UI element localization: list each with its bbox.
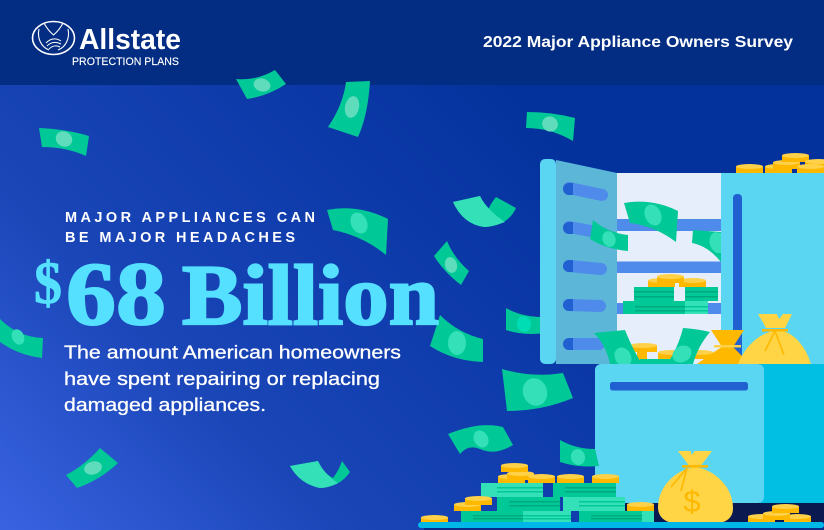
icon: hands in oval	[32, 22, 74, 54]
bill	[0, 319, 43, 358]
coin piles	[421, 463, 811, 524]
description: damaged appliances.	[64, 395, 266, 415]
yellow money bag	[738, 314, 811, 364]
dark shadow band	[625, 503, 824, 522]
interior	[617, 173, 721, 364]
big number: Billion	[182, 247, 439, 343]
money bag with dollar sign	[658, 451, 733, 523]
cash stacks	[461, 483, 654, 522]
description: The amount American homeowners	[64, 342, 401, 362]
open door	[540, 159, 617, 364]
bills at fridge bottom	[594, 328, 710, 370]
description: have spent repairing or replacing	[64, 369, 380, 389]
freezer side	[760, 364, 824, 503]
coins and cash on shelf	[623, 274, 718, 314]
panel: falling money	[0, 70, 575, 488]
floor	[418, 522, 824, 530]
big number: $	[34, 250, 62, 316]
bill	[328, 81, 370, 137]
right fridge wall	[721, 173, 824, 364]
bill	[236, 70, 286, 99]
fridge handle	[733, 194, 742, 364]
coins on top of fridge	[736, 153, 824, 173]
big number	[34, 245, 439, 344]
door racks	[569, 188, 602, 344]
headline: BE MAJOR HEADACHES	[65, 230, 295, 246]
survey title: 2022 Major Appliance Owners Survey	[483, 34, 793, 51]
freezer front	[595, 364, 764, 503]
bill	[506, 308, 545, 334]
fridge: upper compartment	[540, 153, 824, 370]
headline	[65, 210, 315, 246]
wordmark: Allstate	[79, 24, 181, 56]
headline: MAJOR APPLIANCES CAN	[65, 210, 315, 226]
bill	[448, 425, 513, 454]
bill	[290, 461, 350, 488]
coins at fridge bottom	[630, 343, 713, 364]
big number: 68	[66, 245, 166, 344]
bill	[66, 448, 118, 488]
orange money bag	[697, 330, 750, 364]
description	[64, 342, 401, 415]
logo: Allstate Protection Plans	[32, 22, 181, 68]
bill	[39, 128, 89, 156]
bill	[502, 369, 573, 411]
sub-brand: PROTECTION PLANS	[72, 56, 179, 68]
bill	[526, 112, 575, 141]
header band	[0, 0, 824, 85]
freezer handle	[610, 382, 748, 390]
bill over freezer	[560, 440, 599, 467]
bills inside fridge	[590, 202, 721, 262]
bill	[434, 241, 469, 285]
fridge: lower freezer	[595, 364, 824, 522]
bill	[430, 315, 483, 362]
dollar sign: $	[683, 484, 701, 519]
bill	[327, 208, 388, 255]
bill	[453, 196, 516, 227]
shelves	[617, 219, 721, 314]
